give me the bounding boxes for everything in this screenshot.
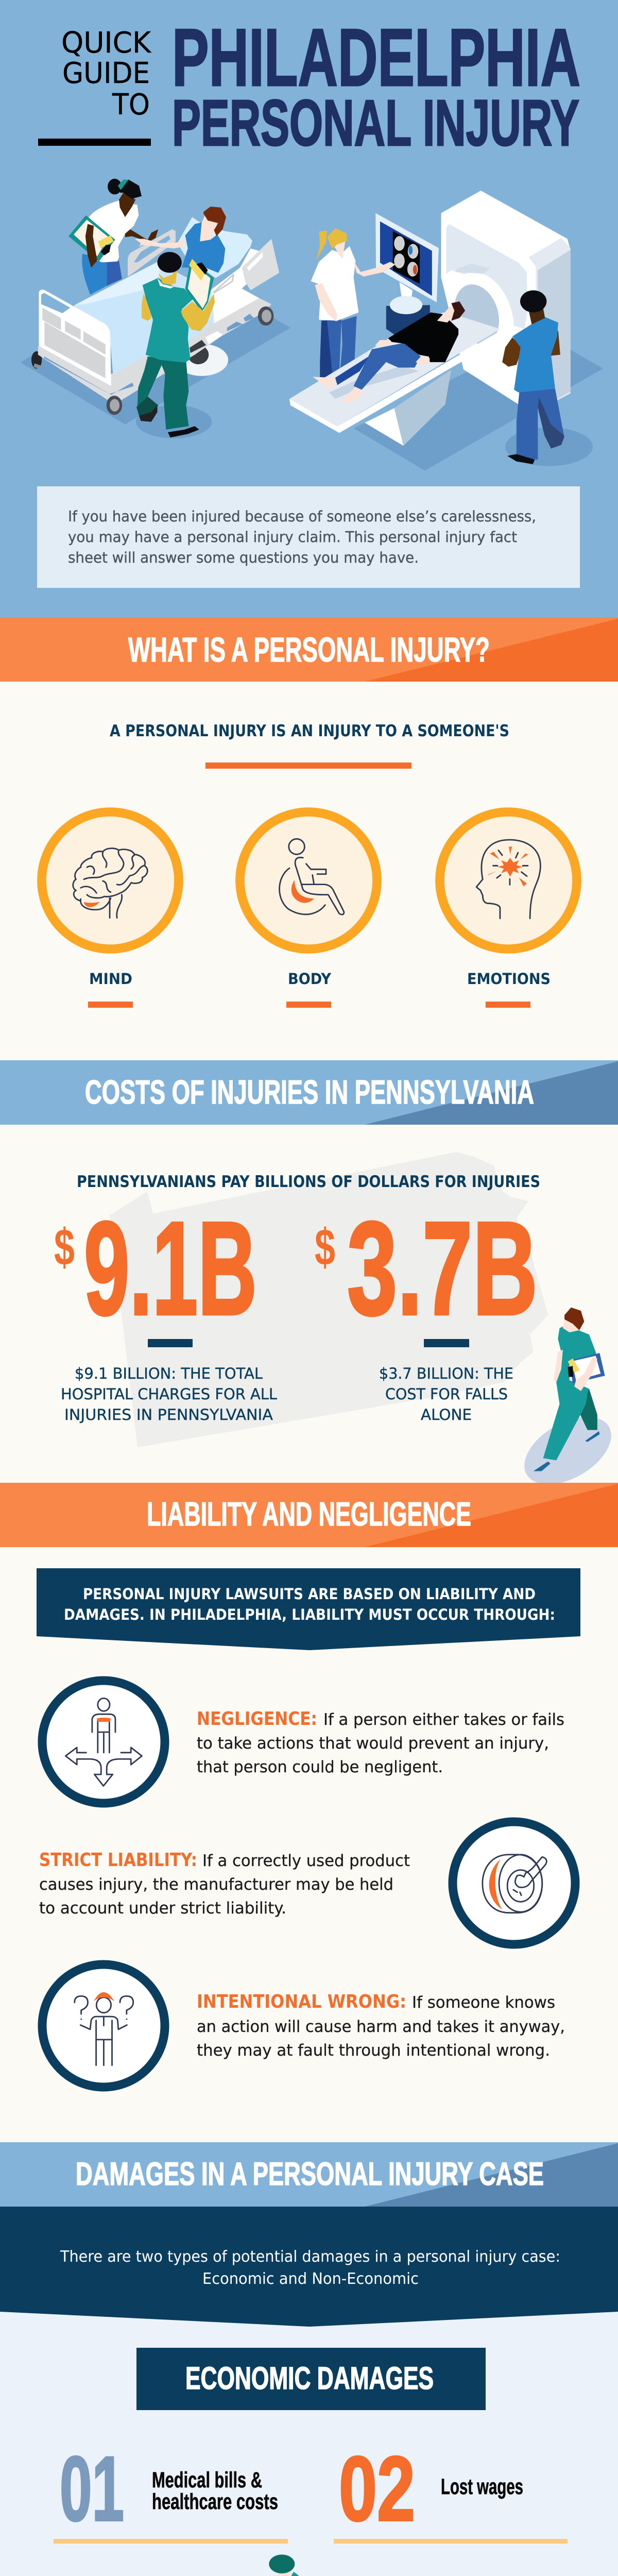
- subheading: A PERSONAL INJURY IS AN INJURY TO A SOMEONE'S: [110, 722, 509, 740]
- stat: 9.1 billion: $: [54, 1218, 75, 1276]
- callout: [37, 1568, 580, 1650]
- stat: 3.7 billion: $3.7 BILLION: THE: [379, 1365, 513, 1382]
- panel: costs of injuries: [0, 1060, 618, 1495]
- label: mind: MIND: [89, 970, 132, 988]
- item: economic 02: [334, 2437, 568, 2544]
- stat: 3.7 billion: ALONE: [421, 1406, 472, 1423]
- title: QUICK: [61, 26, 151, 60]
- label: mind: [88, 970, 133, 1008]
- stat: 3.7 billion: [315, 1194, 538, 1423]
- bed wheels: [107, 307, 273, 415]
- panel: what is a personal injury: [0, 617, 618, 1060]
- panel: damages: [0, 2142, 618, 2576]
- stat: 9.1 billion: $9.1 BILLION: THE TOTAL: [75, 1365, 263, 1382]
- text: intentional wrong: they may at fault through intentional wrong.: [197, 2041, 550, 2060]
- scanner table: [289, 312, 502, 446]
- technician in blue: [502, 291, 564, 464]
- stat: 3.7 billion: COST FOR FALLS: [385, 1385, 508, 1403]
- callout: DAMAGES. IN PHILADELPHIA, LIABILITY MUST OCCUR THROUGH:: [64, 1606, 555, 1623]
- male nurse in teal scrubs: [136, 252, 215, 437]
- label: emotions: EMOTIONS: [467, 970, 551, 988]
- label: body: BODY: [288, 970, 332, 988]
- heading banner: [0, 617, 618, 682]
- intro callout: There are two types of potential damages in a personal injury case:: [60, 2248, 560, 2266]
- stat: 3.7 billion: $: [315, 1218, 335, 1276]
- icon: body: [240, 812, 377, 949]
- stat: 9.1 billion: INJURIES IN PENNSYLVANIA: [64, 1406, 273, 1423]
- text: strict liability: to account under strict liability.: [39, 1899, 286, 1918]
- callout: PERSONAL INJURY LAWSUITS ARE BASED ON LIABILITY AND: [83, 1585, 536, 1603]
- illustration: hospital bed with nurses and patient: [21, 179, 290, 438]
- panel: hero: [0, 0, 618, 617]
- label: emotions: [467, 970, 551, 1008]
- patient lying on table: [313, 301, 465, 402]
- blonde technician: [311, 228, 396, 378]
- item: economic 01: Medical bills &: [152, 2468, 262, 2493]
- text: strict liability: If a correctly used product: [202, 1852, 410, 1870]
- heading banner: [0, 1060, 618, 1125]
- heading banner: LIABILITY AND NEGLIGENCE: [147, 1495, 471, 1533]
- heading: economic damages: [136, 2348, 486, 2410]
- icon: person at crossroads: [42, 1681, 165, 1803]
- text: strict liability: [39, 1850, 410, 1918]
- intro text box: If you have been injured because of someone else’s carelessness,: [68, 508, 536, 525]
- heading banner: [0, 2142, 618, 2207]
- intro text box: sheet will answer some questions you may have.: [68, 549, 419, 566]
- text: intentional wrong: an action will cause harm and takes it anyway,: [197, 2018, 565, 2036]
- label: body: [286, 970, 332, 1008]
- stat: 9.1 billion: HOSPITAL CHARGES FOR ALL: [61, 1385, 277, 1403]
- icon: person with questions: [42, 1964, 165, 2087]
- panel: liability and negligence: [0, 1483, 618, 2142]
- intro callout: Economic and Non-Economic: [202, 2270, 419, 2288]
- item: economic 02: Lost wages: [441, 2475, 523, 2499]
- intro text box: [37, 486, 580, 588]
- text: strict liability: causes injury, the manufacturer may be held: [39, 1875, 393, 1894]
- item: economic 01: 01: [60, 2437, 124, 2540]
- bed foot board: [39, 290, 111, 386]
- nurse: [256, 2554, 314, 2576]
- stat: 9.1 billion: [54, 1194, 277, 1423]
- icon: wheel and wrench: [453, 1822, 575, 1944]
- text: intentional wrong: INTENTIONAL WRONG:: [197, 1991, 406, 2012]
- illustration: nurse pushing patient in wheelchair: [249, 2554, 413, 2576]
- title: GUIDE: [62, 57, 150, 90]
- text: negligence: that person could be negligent.: [197, 1758, 443, 1776]
- item: economic 02: 02: [339, 2437, 415, 2540]
- bed back rail: [128, 229, 176, 276]
- stat: 9.1 billion: 9.1B: [84, 1194, 257, 1343]
- title: TO: [112, 88, 150, 122]
- patient on bed: [135, 207, 252, 278]
- text: intentional wrong: If someone knows: [412, 1993, 555, 2012]
- text: intentional wrong: [197, 1991, 565, 2060]
- item: economic 01: healthcare costs: [152, 2489, 278, 2514]
- intro text box: you may have a personal injury claim. This personal injury fact: [68, 529, 517, 546]
- map: Pennsylvania: [110, 1152, 548, 1447]
- icon: emotions: [440, 812, 577, 949]
- text: negligence: NEGLIGENCE:: [197, 1708, 317, 1730]
- title: [38, 12, 580, 159]
- item: economic 01: [54, 2437, 288, 2544]
- text: negligence: If a person either takes or fails: [323, 1710, 564, 1729]
- bed chassis and mattress: [38, 239, 279, 400]
- icon: mind: [42, 812, 179, 949]
- heading banner: [0, 1483, 618, 1547]
- nurse with clipboard: [68, 179, 158, 295]
- intro callout: [0, 2207, 618, 2327]
- subheading: PENNSYLVANIANS PAY BILLIONS OF DOLLARS FOR INJURIES: [77, 1173, 540, 1191]
- illustration: MRI scanner with technicians and patient: [289, 191, 603, 471]
- text: negligence: [197, 1708, 564, 1776]
- heading: economic damages: ECONOMIC DAMAGES: [185, 2361, 434, 2396]
- monitor: [375, 213, 439, 334]
- illustration: walking nurse: [507, 1308, 618, 1495]
- text: strict liability: STRICT LIABILITY:: [39, 1850, 197, 1871]
- text: negligence: to take actions that would prevent an injury,: [197, 1734, 549, 1753]
